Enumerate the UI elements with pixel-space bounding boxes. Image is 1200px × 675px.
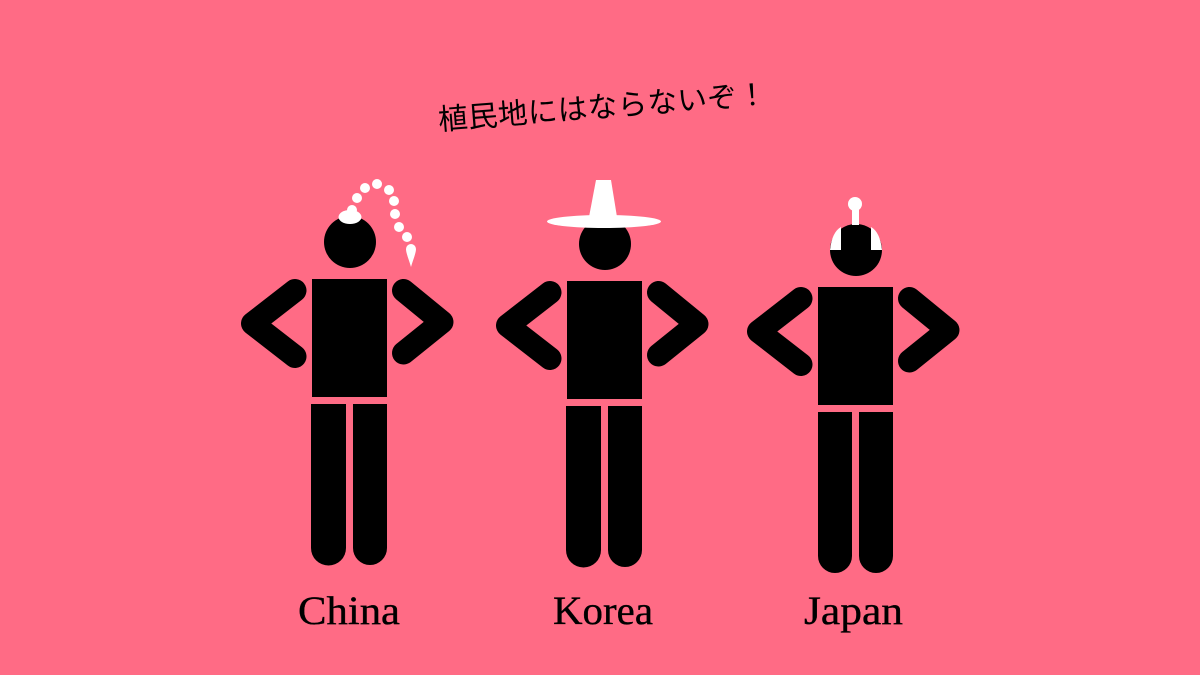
figure: China: [252, 179, 442, 566]
icon: China queue braid: [352, 179, 416, 267]
Korea left leg: [566, 406, 601, 568]
Japan right leg: [859, 412, 893, 573]
Japan left arm: [758, 298, 801, 364]
China right arm: [404, 290, 442, 353]
Korea left arm: [508, 292, 550, 358]
Japan right arm: [910, 298, 948, 361]
China torso: [312, 279, 387, 397]
Korea head: [579, 218, 631, 270]
label: Korea: Korea: [553, 588, 653, 633]
Japan torso: [818, 287, 893, 405]
icon: China hair bun: [338, 205, 362, 224]
figure: Korea: [508, 180, 697, 568]
Korea torso: [567, 281, 642, 399]
China left arm: [252, 290, 295, 356]
speech text: 植民地にはならないぞ！: [437, 78, 769, 137]
label: Japan: Japan: [804, 588, 903, 633]
Japan head: [830, 224, 882, 276]
figure: Japan: [758, 197, 948, 573]
icon: Korean gat hat: [547, 180, 661, 228]
China left leg: [311, 404, 346, 566]
China head: [324, 216, 376, 268]
Korea right arm: [658, 292, 697, 355]
Japan left leg: [818, 412, 852, 573]
label: China: China: [298, 588, 400, 633]
Korea right leg: [608, 406, 642, 567]
China right leg: [353, 404, 387, 565]
icon: Japanese topknot: [830, 197, 882, 250]
